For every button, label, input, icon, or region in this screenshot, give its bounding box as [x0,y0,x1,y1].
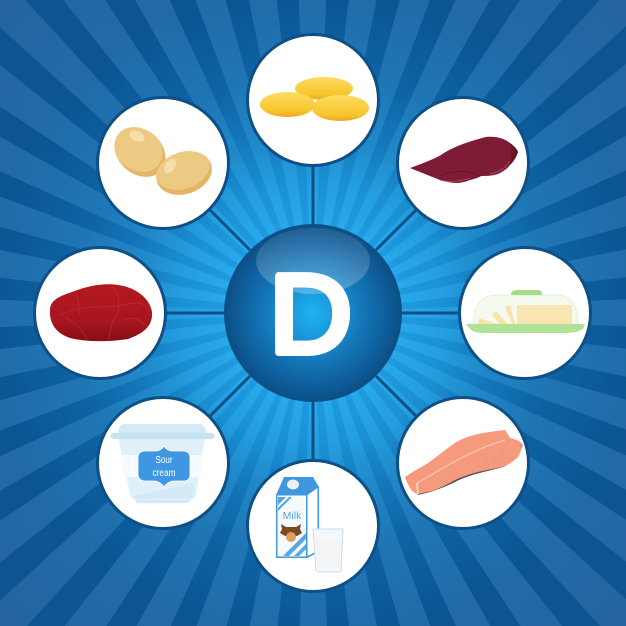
label: Milk: Milk [283,510,302,522]
panel: fish oil capsules [248,34,378,166]
sphere gloss [256,228,370,294]
central vitamin D sphere [224,224,402,402]
panel: eggs [98,98,228,228]
connector lines [165,165,461,462]
label plate: Sour cream: Sour [156,455,173,466]
icon: eggs [114,127,212,195]
panel: beef [34,248,166,378]
icon: salmon fillet [405,430,523,495]
panel: milk and glass [248,460,378,592]
panel: salmon [398,398,528,528]
panel: sour cream [98,398,228,528]
icon: steak [50,284,152,341]
label plate: Sour cream [138,446,190,487]
panel: butter dish [460,248,590,378]
icon: capsules [260,77,369,121]
icon: sour cream tub [110,424,215,503]
icon: butter dish [466,290,585,333]
panel: liver [398,98,528,228]
letter D: D [269,252,352,376]
label plate: Sour cream: cream [152,468,176,479]
icon: liver [410,137,518,183]
icon: cow head [280,524,302,542]
icon: glass of milk [313,529,343,572]
